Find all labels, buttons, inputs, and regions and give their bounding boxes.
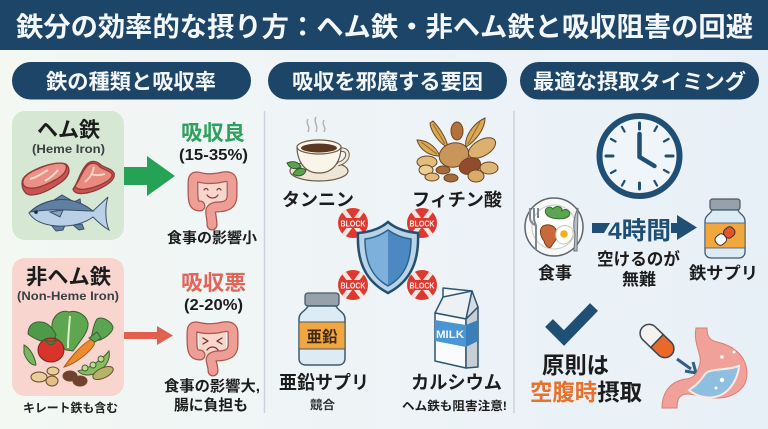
non-heme iron english label: (Non-Heme Iron): [17, 289, 119, 303]
label: tannin: タンニン: [282, 190, 354, 210]
heading: iron types and absorption: 鉄の種類と吸収率: [46, 71, 216, 94]
note: large food impact: 食事の影響大,: [164, 377, 260, 395]
title banner: 鉄分の効率的な摂り方：ヘム鉄・非ヘム鉄と吸収阻害の回避: [16, 12, 753, 42]
heading: absorption blockers: 吸収を邪魔する要因: [292, 71, 483, 94]
heading: absorption blockers: [268, 62, 507, 100]
label: phytic acid: フィチン酸: [412, 190, 502, 210]
label: zinc supplement: 亜鉛サプリ: [279, 372, 369, 393]
label: principle: 原則は: [542, 352, 609, 378]
arrow: four hours: 4時間: [608, 217, 671, 245]
title banner: [0, 0, 768, 50]
arrow: capsule into stomach: [677, 359, 696, 373]
note: competition: 競合: [310, 397, 335, 412]
icon: happy intestine: [193, 177, 232, 225]
heme iron english label: (Heme Iron): [32, 142, 105, 156]
icon: vegetables and beans: [24, 311, 115, 386]
label: poor absorption: 吸収悪: [181, 272, 246, 295]
label: calcium: カルシウム: [411, 372, 502, 393]
icon: meal plate: [525, 198, 583, 256]
icon: unhappy intestine: [192, 327, 233, 371]
heading: iron types and absorption: [12, 62, 251, 100]
icon: steak left: [22, 163, 69, 195]
block badge: bottom right: BLOCK: [410, 280, 435, 290]
label: iron supplement: 鉄サプリ: [689, 264, 758, 283]
heading: optimal timing: 最適な摂取タイミング: [533, 70, 746, 94]
absorption rate: 15-35%: (15-35%): [179, 147, 248, 164]
icon: nuts and grains: [417, 118, 499, 182]
icon: steak right: [73, 161, 114, 194]
note: burden on gut: 腸に負担も: [174, 396, 248, 414]
heading: optimal timing: [520, 62, 759, 100]
arrow: four hours: [592, 215, 697, 245]
heme iron label: ヘム鉄: [37, 119, 100, 142]
label: good absorption: 吸収良: [181, 122, 245, 145]
icon: fish: [29, 195, 109, 231]
non-heme iron label: 非ヘム鉄: [26, 266, 111, 289]
absorption rate: 2-20%: (2-20%): [184, 297, 243, 314]
icon: block badges and shield: [338, 208, 437, 300]
icon: milk carton: MILK: [436, 329, 464, 341]
arrow: non-heme to poor absorption: [124, 326, 173, 345]
icon: capsule: [636, 321, 678, 361]
icon: zinc supplement bottle: [299, 293, 345, 365]
arrow: heme to good absorption: [124, 156, 175, 196]
icon: iron supplement bottle: [705, 199, 745, 258]
label: take on an empty stomach: 空腹時摂取: [530, 379, 642, 405]
icon: zinc supplement bottle: 亜鉛: [306, 328, 338, 346]
note: safest: 無難: [622, 270, 657, 289]
note: safe to leave a gap: 空けるのが: [597, 249, 680, 269]
block badge: bottom left: BLOCK: [340, 280, 366, 290]
panel: heme iron: [12, 111, 124, 240]
icon: stomach: [662, 328, 747, 408]
icon: coffee cup: [287, 117, 348, 181]
icon: shield: [358, 222, 418, 293]
icon: check mark: [549, 307, 594, 338]
note: little food impact: 食事の影響小: [167, 229, 258, 247]
note: includes chelated iron: キレート鉄も含む: [23, 400, 118, 415]
block badge: top right: BLOCK: [410, 218, 435, 228]
icon: milk carton: [435, 288, 478, 368]
block badge: top left: BLOCK: [340, 218, 366, 228]
panel: non-heme iron: [12, 258, 124, 396]
icon: clock: [600, 116, 680, 196]
note: also inhibits heme iron: ヘム鉄も阻害注意!: [402, 398, 507, 413]
label: meal: 食事: [538, 264, 572, 283]
